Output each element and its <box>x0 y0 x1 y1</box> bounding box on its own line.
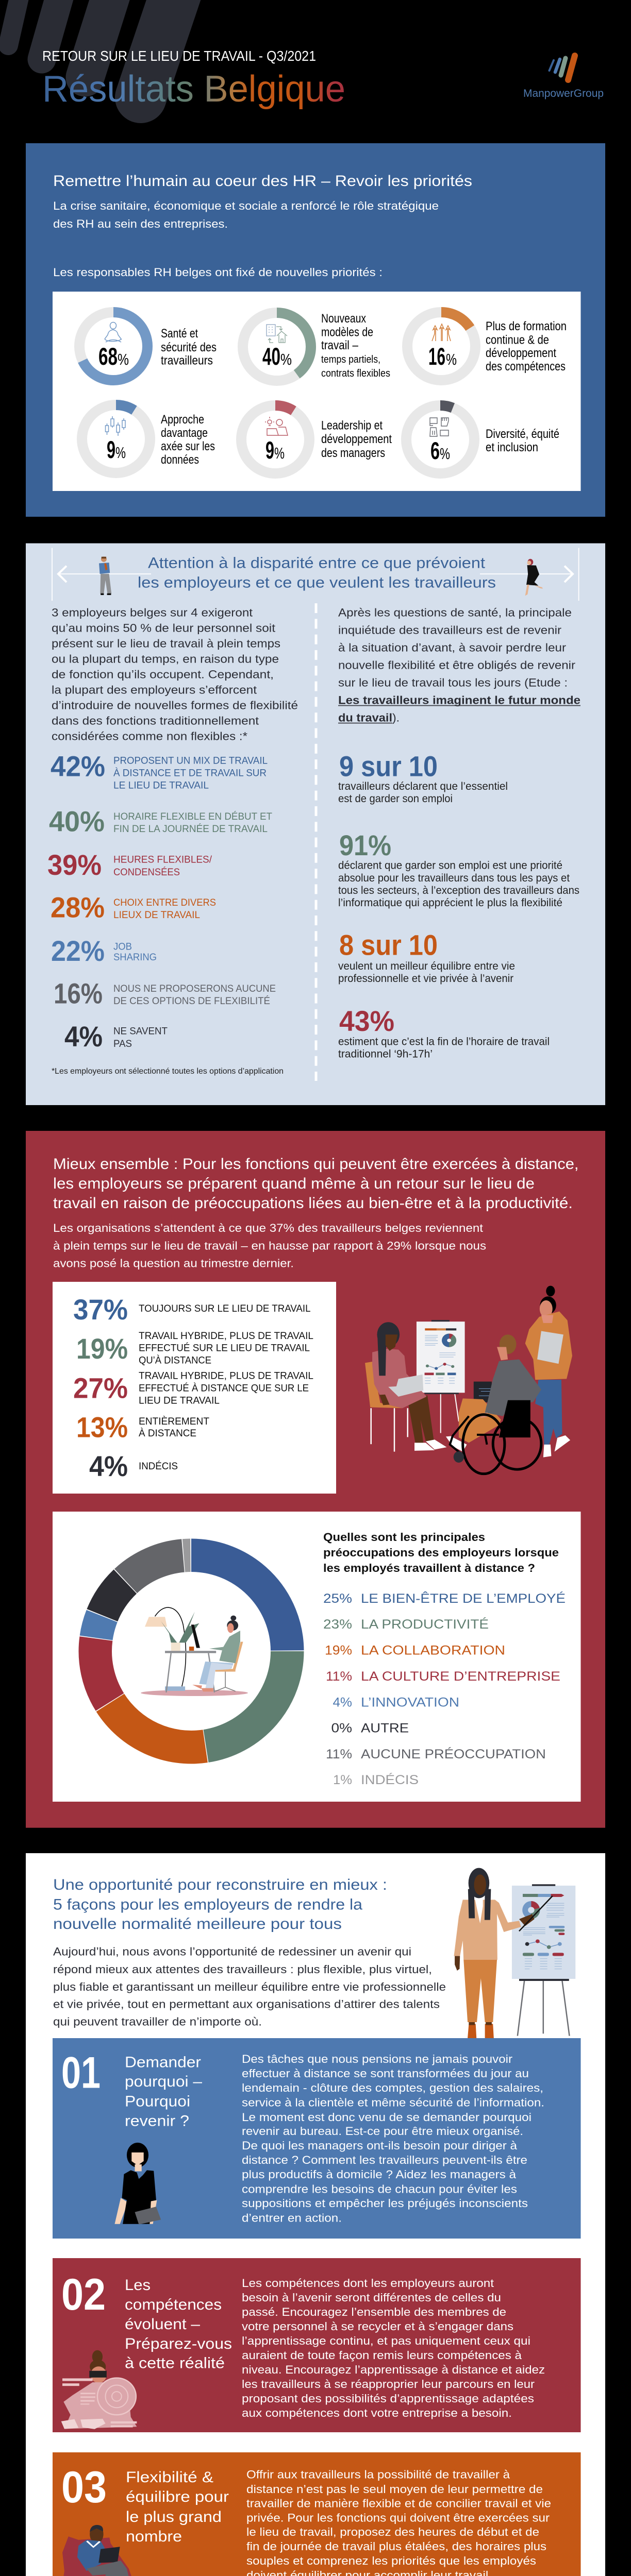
stat: 16% <box>54 977 276 1009</box>
illustration: presenter and flipchart <box>454 1868 575 2038</box>
logo: ManpowerGroup <box>523 56 604 99</box>
label: modèles: Nouveaux <box>321 312 366 326</box>
label: modèles: contrats flexibles <box>321 368 390 379</box>
step text: proposant des possibilités d’apprentissage adaptées <box>242 2392 534 2405</box>
step title: Pourquoi <box>125 2093 190 2110</box>
step text: Le moment est donc venu de se demander pourquoi <box>242 2111 532 2124</box>
intro text <box>53 1222 486 1269</box>
icon: arrows up <box>432 324 451 341</box>
icon: linked hands <box>430 418 449 436</box>
stat: 39%: 39% <box>47 849 102 881</box>
label: santé: sécurité des <box>161 341 217 354</box>
step title: Les <box>125 2277 151 2294</box>
figure: standing woman <box>525 1286 572 1458</box>
stat: 27%: 27% <box>73 1372 128 1404</box>
stat: 9 sur 10: est de garder son emploi <box>338 793 453 805</box>
intro text: plus fiable et garantissant un meilleur équilibre entre vie professionnelle <box>53 1980 446 1993</box>
label: modèles <box>321 312 390 379</box>
intro text <box>53 1945 446 2028</box>
donut: 68% santé: 68 <box>98 343 118 370</box>
stat: 9 sur 10 <box>338 750 508 805</box>
label: leadership: des managers <box>321 446 385 460</box>
label: données: davantage <box>161 426 208 440</box>
heading: Remettre l’humain au coeur des HR – Revoir les priorités <box>53 173 472 190</box>
stat: 8 sur 10: 8 sur 10 <box>339 928 438 961</box>
heading: 5 façons pour les employeurs de rendre la <box>53 1896 362 1913</box>
heading <box>138 555 496 591</box>
stat: 28%: LIEUX DE TRAVAIL <box>113 909 200 921</box>
left text: dans des fonctions traditionnellement <box>52 715 259 727</box>
icon: candlestick chart <box>105 416 125 436</box>
legend: LA CULTURE D’ENTREPRISE <box>361 1669 560 1684</box>
donut: 16% formation: 16 <box>428 343 445 370</box>
label: données: données <box>161 453 199 467</box>
label: modèles: temps partiels, <box>321 354 380 365</box>
stat: 19%: TRAVAIL HYBRIDE, PLUS DE TRAVAIL <box>139 1330 313 1342</box>
stat: 43%: estiment que c’est la fin de l’horaire de travail <box>338 1036 550 1047</box>
step text: plus productifs à domicile ? Aidez les managers à <box>242 2168 517 2181</box>
intro text: La crise sanitaire, économique et sociale a renforcé le rôle stratégique <box>53 199 439 212</box>
label: formation: continue & de <box>486 333 549 347</box>
step text: travailler de manière flexible et de concilier travail et vie <box>246 2497 551 2510</box>
legend: AUTRE <box>361 1721 409 1736</box>
right text: à la situation d’avant, à savoir perdre leur <box>338 641 567 654</box>
left text: considérées comme non flexibles :* <box>52 730 247 743</box>
stat: 42%: PROPOSENT UN MIX DE TRAVAIL <box>113 755 268 767</box>
donut: 9% leadership: 9 <box>265 436 274 464</box>
legend: AUCUNE PRÉOCCUPATION <box>361 1747 546 1761</box>
figure: woman with VR headset <box>61 2350 137 2429</box>
step title: équilibre pour <box>126 2488 229 2505</box>
left text: présent sur le lieu de travail à plein temps <box>52 637 280 650</box>
step title: compétences <box>125 2296 222 2313</box>
stat: 22%: JOB <box>113 941 132 952</box>
right text: Les travailleurs imaginent le futur monde <box>338 694 580 707</box>
label: formation: développement <box>486 346 556 360</box>
intro text: Les organisations s’attendent à ce que 37% des travailleurs belges reviennent <box>53 1222 484 1234</box>
step text: De quoi les managers ont-ils besoin pour diriger à <box>242 2139 518 2152</box>
stat: 43%: 43% <box>339 1005 394 1037</box>
donut: 40% modèles: % <box>280 350 292 368</box>
intro text: Les responsables RH belges ont fixé de nouvelles priorités : <box>53 266 383 279</box>
step title: nombre <box>126 2528 182 2545</box>
legend: 23% <box>323 1617 352 1632</box>
step text: auraient de toute façon remis leurs compétences à <box>242 2349 522 2362</box>
stat: 91%: absolue pour les travailleurs dans tous les pays et <box>338 872 570 884</box>
heading: nouvelle normalité meilleure pour tous <box>53 1916 342 1933</box>
label: santé: travailleurs <box>161 353 213 368</box>
label: données: Approche <box>161 413 204 427</box>
step text: Les compétences dont les employeurs auront <box>242 2277 494 2290</box>
stat: 13%: À DISTANCE <box>139 1427 196 1439</box>
stat: 91%: 91% <box>339 829 391 861</box>
left text: de fonction qu’ils occupent. Cependant, <box>52 668 274 681</box>
step text: fin de journée de travail plus étalées, des horaires plus <box>246 2540 546 2553</box>
step title: Flexibilité & <box>126 2469 213 2486</box>
legend: 11% <box>326 1669 352 1684</box>
card: retour au travail <box>53 1282 336 1494</box>
right text: Après les questions de santé, la principale <box>338 606 572 619</box>
legend: 25% <box>323 1591 352 1606</box>
right text: inquiétude des travailleurs est de revenir <box>338 624 562 637</box>
step title <box>125 2277 232 2372</box>
step text: aux compétences dont votre entreprise a besoin. <box>242 2406 512 2419</box>
label: formation: Plus de formation <box>486 319 567 333</box>
label: diversité <box>486 427 559 454</box>
stat: 91% <box>338 829 579 909</box>
stat: 19% <box>76 1330 313 1366</box>
step text: l’apprentissage continu, et pas uniquement ceux qui <box>242 2334 530 2347</box>
step text: privée. Pour les fonctions qui doivent être exercées sur <box>246 2512 550 2524</box>
legend: LA PRODUCTIVITÉ <box>361 1617 489 1632</box>
stat: 9 sur 10: travailleurs déclarent que l’essentiel <box>338 781 508 792</box>
donut: 9% données: 9 <box>107 436 115 463</box>
step text: distance ? Comment les travailleurs peuvent-ils être <box>242 2154 527 2166</box>
panel: opportunité <box>26 1853 605 2576</box>
panel: disparité employeurs / travailleurs <box>26 543 605 1105</box>
stat: 13% <box>76 1411 209 1443</box>
stat: 42%: LE LIEU DE TRAVAIL <box>113 780 209 791</box>
intro text: et vie privée, tout en permettant aux organisations d’attirer des talents <box>53 1998 440 2011</box>
stat: 91%: l’informatique qui apprécient le plus la flexibilité <box>338 897 562 909</box>
left text: la plupart des employeurs s’efforcent <box>52 684 257 697</box>
illustration: woman at desk <box>141 1607 248 1696</box>
step text: Offrir aux travailleurs la possibilité de travailler à <box>246 2468 510 2481</box>
left text <box>52 606 298 743</box>
stat: 42%: 42% <box>51 750 105 783</box>
donut chart <box>56 1516 327 1787</box>
step text: comprendre les besoins de chacun pour éviter les <box>242 2183 517 2196</box>
intro text: Aujourd’hui, nous avons l’opportunité de redessiner un avenir qui <box>53 1945 411 1958</box>
step text: passé. Encouragez l’ensemble des membres de <box>242 2306 506 2318</box>
donut: 16% formation: % <box>446 350 457 368</box>
icon: leader with laptop <box>265 417 288 435</box>
number: 03 <box>61 2463 107 2512</box>
stat: 39%: HEURES FLEXIBLES/ <box>113 854 212 866</box>
label: modèles: travail – <box>321 338 359 352</box>
number: 01 <box>61 2048 101 2098</box>
right text: ). <box>392 711 400 724</box>
legend: INDÉCIS <box>361 1772 419 1787</box>
stat: 40% <box>49 805 272 837</box>
label: diversité: et inclusion <box>486 440 538 454</box>
stat: 19%: EFFECTUÉ SUR LE LIEU DE TRAVAIL <box>139 1342 310 1353</box>
step text: le lieu de travail, proposez des heures de début et de <box>246 2526 539 2538</box>
step title: à cette réalité <box>125 2355 225 2372</box>
number: 02 <box>61 2270 106 2319</box>
intro text: à plein temps sur le lieu de travail – en hausse par rapport à 29% lorsque nous <box>53 1240 486 1252</box>
step text: votre personnel à se recycler et à s’engager dans <box>242 2320 513 2333</box>
right text: sur le lieu de travail tous les jours (Etude : <box>338 676 568 689</box>
donut: 9% données: % <box>115 444 126 462</box>
stat: 8 sur 10: veulent un meilleur équilibre entre vie <box>338 960 515 972</box>
supertitle: RETOUR SUR LE LIEU DE TRAVAIL - Q3/2021 <box>42 48 316 64</box>
right text: nouvelle flexibilité et être obligés de revenir <box>338 659 576 672</box>
step text: distance n’est pas le seul moyen de leur permettre de <box>246 2483 543 2496</box>
stat: 19%: 19% <box>76 1332 128 1365</box>
heading: travail en raison de préoccupations liées au bien-être et à la productivité. <box>53 1195 573 1212</box>
stat: 16%: DE CES OPTIONS DE FLEXIBILITÉ <box>113 995 270 1007</box>
label: formation: des compétences <box>486 360 566 374</box>
figure: seated woman <box>365 1322 446 1452</box>
stat: 27% <box>73 1370 313 1406</box>
illustration: team meeting <box>365 1286 572 1474</box>
step text <box>242 2053 544 2225</box>
heading: les employeurs se préparent quand même à un retour sur le lieu de <box>53 1175 535 1192</box>
stat: 8 sur 10 <box>338 928 515 985</box>
intro text: des RH au sein des entreprises. <box>53 217 228 230</box>
step text: souples et comprenez les priorités que les employés <box>246 2554 536 2567</box>
label: leadership: développement <box>321 432 392 446</box>
right text: du travail <box>338 711 392 724</box>
left text: 3 employeurs belges sur 4 exigeront <box>52 606 253 619</box>
donut: 16% formation <box>407 312 475 380</box>
step text: lendemain - clôture des comptes, gestion des salaires, <box>242 2081 543 2094</box>
stat: 22% <box>51 935 157 967</box>
intro text: répond mieux aux attentes des travailleurs : plus flexible, plus virtuel, <box>53 1963 432 1976</box>
stat: 13%: ENTIÈREMENT <box>139 1415 209 1427</box>
donut: 40% modèles: 40 <box>262 343 280 370</box>
stat: 22%: 22% <box>51 935 105 967</box>
donut: 68% santé: % <box>118 350 129 368</box>
stat: 9 sur 10: 9 sur 10 <box>339 750 438 783</box>
step title: Demander <box>125 2054 201 2071</box>
panel: priorités RH <box>26 143 605 517</box>
stat: 28%: 28% <box>51 891 105 923</box>
arrows <box>52 548 579 601</box>
stat: 4%: INDÉCIS <box>139 1460 178 1472</box>
panel: mieux ensemble <box>26 1131 605 1828</box>
heading: Attention à la disparité entre ce que prévoient <box>148 555 486 572</box>
question: préoccupations des employeurs lorsque <box>323 1546 559 1559</box>
label: modèles: modèles de <box>321 326 373 339</box>
question <box>323 1531 559 1574</box>
left text: qu’au moins 50 % de leur personnel soit <box>52 622 276 635</box>
stat: 13%: 13% <box>76 1411 128 1443</box>
step text: les travailleurs à se réapproprier leur parcours en leur <box>242 2378 535 2391</box>
legend: LA COLLABORATION <box>361 1643 505 1658</box>
step 01 <box>53 2038 580 2239</box>
figure: woman with bag <box>114 2143 161 2225</box>
question: les employés travaillent à distance ? <box>323 1562 535 1574</box>
stat: 19%: QU’À DISTANCE <box>139 1354 211 1366</box>
donut: 68% santé <box>79 312 147 380</box>
stat: 27%: LIEU DE TRAVAIL <box>139 1395 220 1406</box>
step 03 <box>53 2452 580 2576</box>
stat: 91%: tous les secteurs, à l’exception des travailleurs dans <box>338 885 579 896</box>
stat: 43%: traditionnel ‘9h-17h’ <box>338 1048 433 1060</box>
icon: man <box>99 556 111 595</box>
step text: besoin à l’avenir seront différentes de celles du <box>242 2291 501 2304</box>
donut: 9% leadership: % <box>274 444 285 462</box>
title: Résultats Belgique <box>42 69 345 110</box>
step text: Des tâches que nous pensions ne jamais pouvoir <box>242 2053 512 2065</box>
step text: niveau. Encouragez l’apprentissage à distance et aidez <box>242 2363 545 2376</box>
step text: revenir au bureau. Est-ce pour être mieux organisé. <box>242 2125 523 2138</box>
left text: d’introduire de nouvelles formes de flexibilité <box>52 699 298 712</box>
stat: 4%: NE SAVENT <box>113 1026 168 1037</box>
figure: man on beanbag <box>61 2525 138 2576</box>
legend: 0% <box>331 1721 352 1736</box>
step 02 <box>53 2258 580 2432</box>
stat: 42%: À DISTANCE ET DE TRAVAIL SUR <box>113 767 267 779</box>
footnote: *Les employeurs ont sélectionné toutes les options d’application <box>52 1067 284 1076</box>
step text: effectuer à distance se sont transformées du jour au <box>242 2067 529 2080</box>
stat: 4%: 4% <box>89 1450 128 1482</box>
donut: 6% diversité: % <box>440 445 450 463</box>
stat: 37%: TOUJOURS SUR LE LIEU DE TRAVAIL <box>139 1303 311 1314</box>
donut: 9% données <box>82 405 150 473</box>
stat: 8 sur 10: professionnelle et vie privée à l’avenir <box>338 973 513 985</box>
header <box>42 48 604 110</box>
stat: 28% <box>51 891 216 923</box>
stat: 91%: déclarent que garder son emploi est une priorité <box>338 860 562 872</box>
stat: 42% <box>51 750 268 791</box>
donut: 6% diversité: 6 <box>430 437 440 464</box>
stat: 22%: SHARING <box>113 952 157 963</box>
label: santé <box>161 327 217 368</box>
intro text <box>53 199 439 279</box>
stat: 39% <box>47 849 212 881</box>
step text: d’entrer en action. <box>242 2211 342 2225</box>
stat: 16%: NOUS NE PROPOSERONS AUCUNE <box>113 983 276 994</box>
step text: service à la clientèle et même sécurité de l’information. <box>242 2096 544 2109</box>
flipchart <box>417 1320 465 1433</box>
step text: suppositions et empêcher les préjugés inconscients <box>242 2197 528 2210</box>
stat: 40%: 40% <box>49 805 105 837</box>
stat: 37%: 37% <box>73 1293 128 1326</box>
step title <box>126 2469 229 2545</box>
figure: man in wheelchair <box>446 1334 541 1474</box>
legend: LE BIEN-ÊTRE DE L’EMPLOYÉ <box>361 1591 566 1606</box>
stat: 43% <box>338 1005 550 1060</box>
heading <box>53 1156 578 1212</box>
legend: 11% <box>326 1747 352 1761</box>
stat: 27%: EFFECTUÉ À DISTANCE QUE SUR LE <box>139 1382 309 1394</box>
legend: 19% <box>325 1643 352 1658</box>
label: formation <box>486 319 567 374</box>
legend: 1% <box>333 1773 352 1787</box>
stat: 4% <box>64 1020 168 1053</box>
card: priorités <box>53 292 580 491</box>
stat: 16%: 16% <box>54 977 103 1009</box>
heading: Mieux ensemble : Pour les fonctions qui peuvent être exercées à distance, <box>53 1156 578 1173</box>
label: diversité: Diversité, équité <box>486 427 559 441</box>
legend: 4% <box>333 1696 352 1710</box>
step title: évoluent – <box>125 2316 200 2333</box>
step text <box>242 2277 545 2419</box>
step title: le plus grand <box>126 2509 222 2526</box>
heading: les employeurs et ce que veulent les travailleurs <box>138 574 496 591</box>
step title: revenir ? <box>125 2112 189 2130</box>
donut: 9% leadership <box>241 405 309 473</box>
donut: 40% modèles <box>243 313 311 381</box>
step text <box>246 2468 551 2576</box>
intro text: qui peuvent travailler de n’importe où. <box>53 2015 262 2028</box>
right text <box>338 606 580 724</box>
question: Quelles sont les principales <box>323 1531 485 1544</box>
stat: 39%: CONDENSÉES <box>113 866 180 878</box>
heading <box>53 1876 387 1933</box>
left text: ou la plupart du temps, en raison du type <box>52 653 279 666</box>
label: données: axée sur les <box>161 439 215 453</box>
stat: 27%: TRAVAIL HYBRIDE, PLUS DE TRAVAIL <box>139 1370 313 1381</box>
heading: Une opportunité pour reconstruire en mieux : <box>53 1876 387 1893</box>
stat: 4%: 4% <box>64 1020 103 1053</box>
logo: ManpowerGroup: ManpowerGroup <box>523 88 604 99</box>
stat: 37% <box>73 1293 311 1326</box>
step title: pourquoi – <box>125 2073 202 2090</box>
card: préoccupations <box>53 1512 580 1802</box>
stat: 4%: PAS <box>113 1038 132 1049</box>
icon: building and house <box>267 325 287 343</box>
icon: meditation <box>105 323 122 342</box>
legend <box>323 1591 566 1787</box>
step title <box>125 2054 202 2130</box>
stat: 40%: HORAIRE FLEXIBLE EN DÉBUT ET <box>113 810 272 822</box>
label: leadership: Leadership et <box>321 418 383 433</box>
label: données <box>161 413 215 467</box>
donut: 6% diversité <box>406 405 474 473</box>
stat: 28%: CHOIX ENTRE DIVERS <box>113 897 216 908</box>
legend: L’INNOVATION <box>361 1696 459 1710</box>
intro text: avons posé la question au trimestre dernier. <box>53 1257 294 1269</box>
step title: Préparez-vous <box>125 2335 232 2352</box>
label: leadership <box>321 418 392 460</box>
stat: 4% <box>89 1450 178 1482</box>
icon: woman <box>525 559 543 596</box>
label: santé: Santé et <box>161 327 198 341</box>
stat: 40%: FIN DE LA JOURNÉE DE TRAVAIL <box>113 823 268 835</box>
